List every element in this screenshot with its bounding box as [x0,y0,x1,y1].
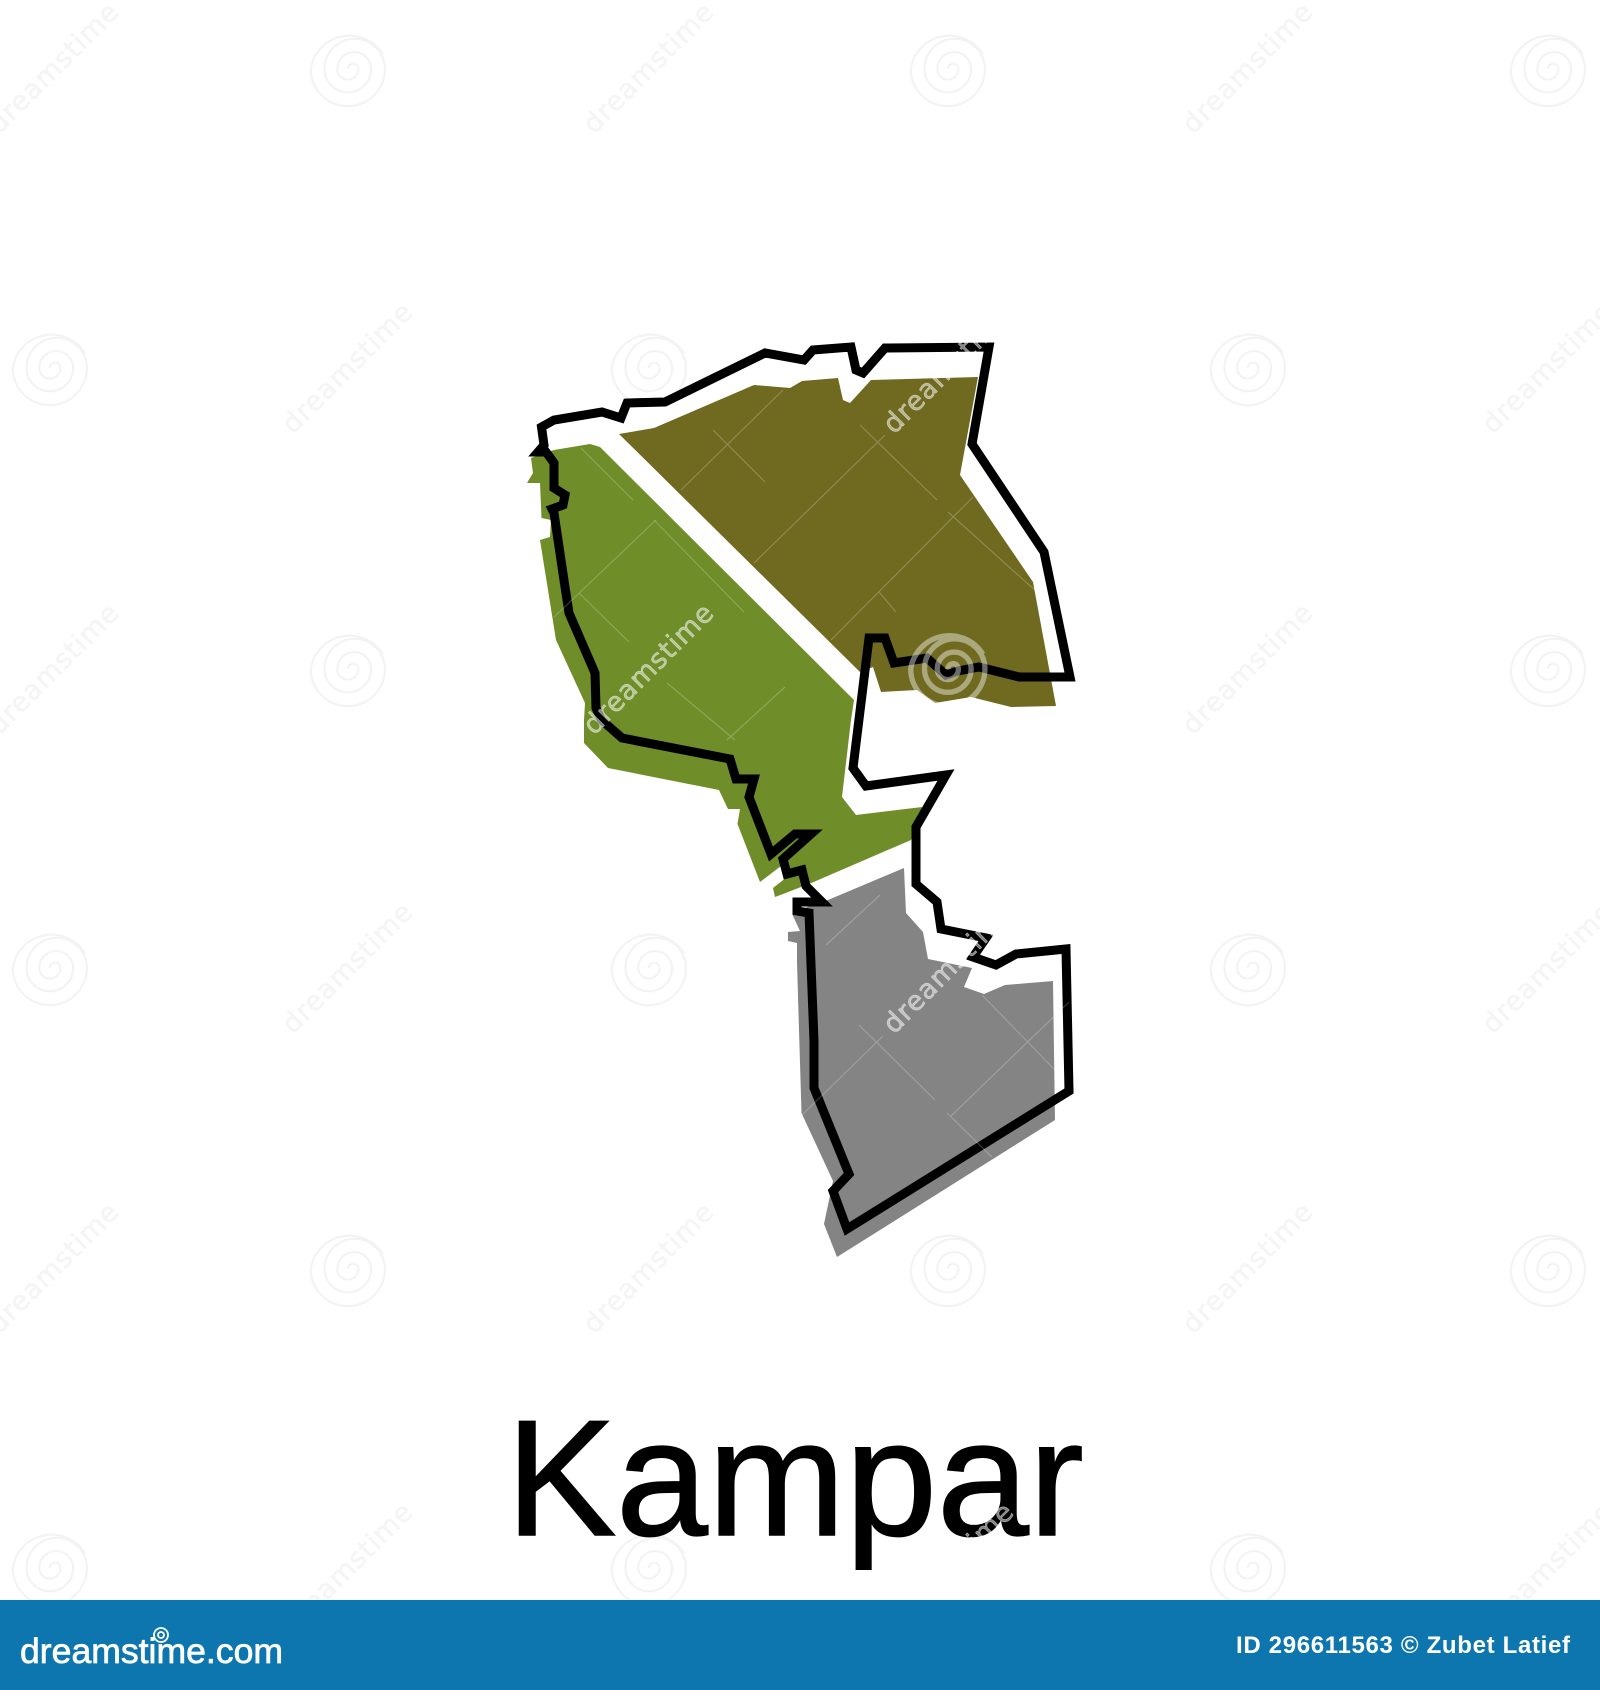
background watermark pattern: dreamstime [1176,1196,1320,1340]
background watermark pattern: dreamstime [1176,597,1320,741]
watermark overlay on map: dreamstime [577,597,721,741]
region: olive north [619,377,1056,707]
title: Kampar [506,1386,1084,1570]
footer bar [0,1600,1600,1690]
region: gray south [788,868,1055,1257]
background watermark pattern: dreamstime [276,1496,420,1640]
logo text: dreamstime.com [20,1631,283,1671]
watermark overlay on map: dreamstime [877,1496,1021,1640]
map of Kampar [527,347,1070,1257]
background watermark pattern: dreamstime [276,296,420,440]
watermark overlay on map: dreamstime [877,896,1021,1040]
background watermark pattern: dreamstime [1176,0,1320,140]
background watermark pattern: dreamstime [577,1196,721,1340]
image credit: ID 296611563 © Zubet Latief [1236,1632,1571,1659]
background watermark pattern: dreamstime [276,896,420,1040]
region: green west [527,444,922,897]
watermark overlay on map [554,296,1069,1640]
background watermark pattern: dreamstime [577,0,721,140]
black boundary outline [538,347,1070,1229]
watermark overlay on map: dreamstime [877,296,1021,440]
icon: logo swirl [154,1628,168,1642]
